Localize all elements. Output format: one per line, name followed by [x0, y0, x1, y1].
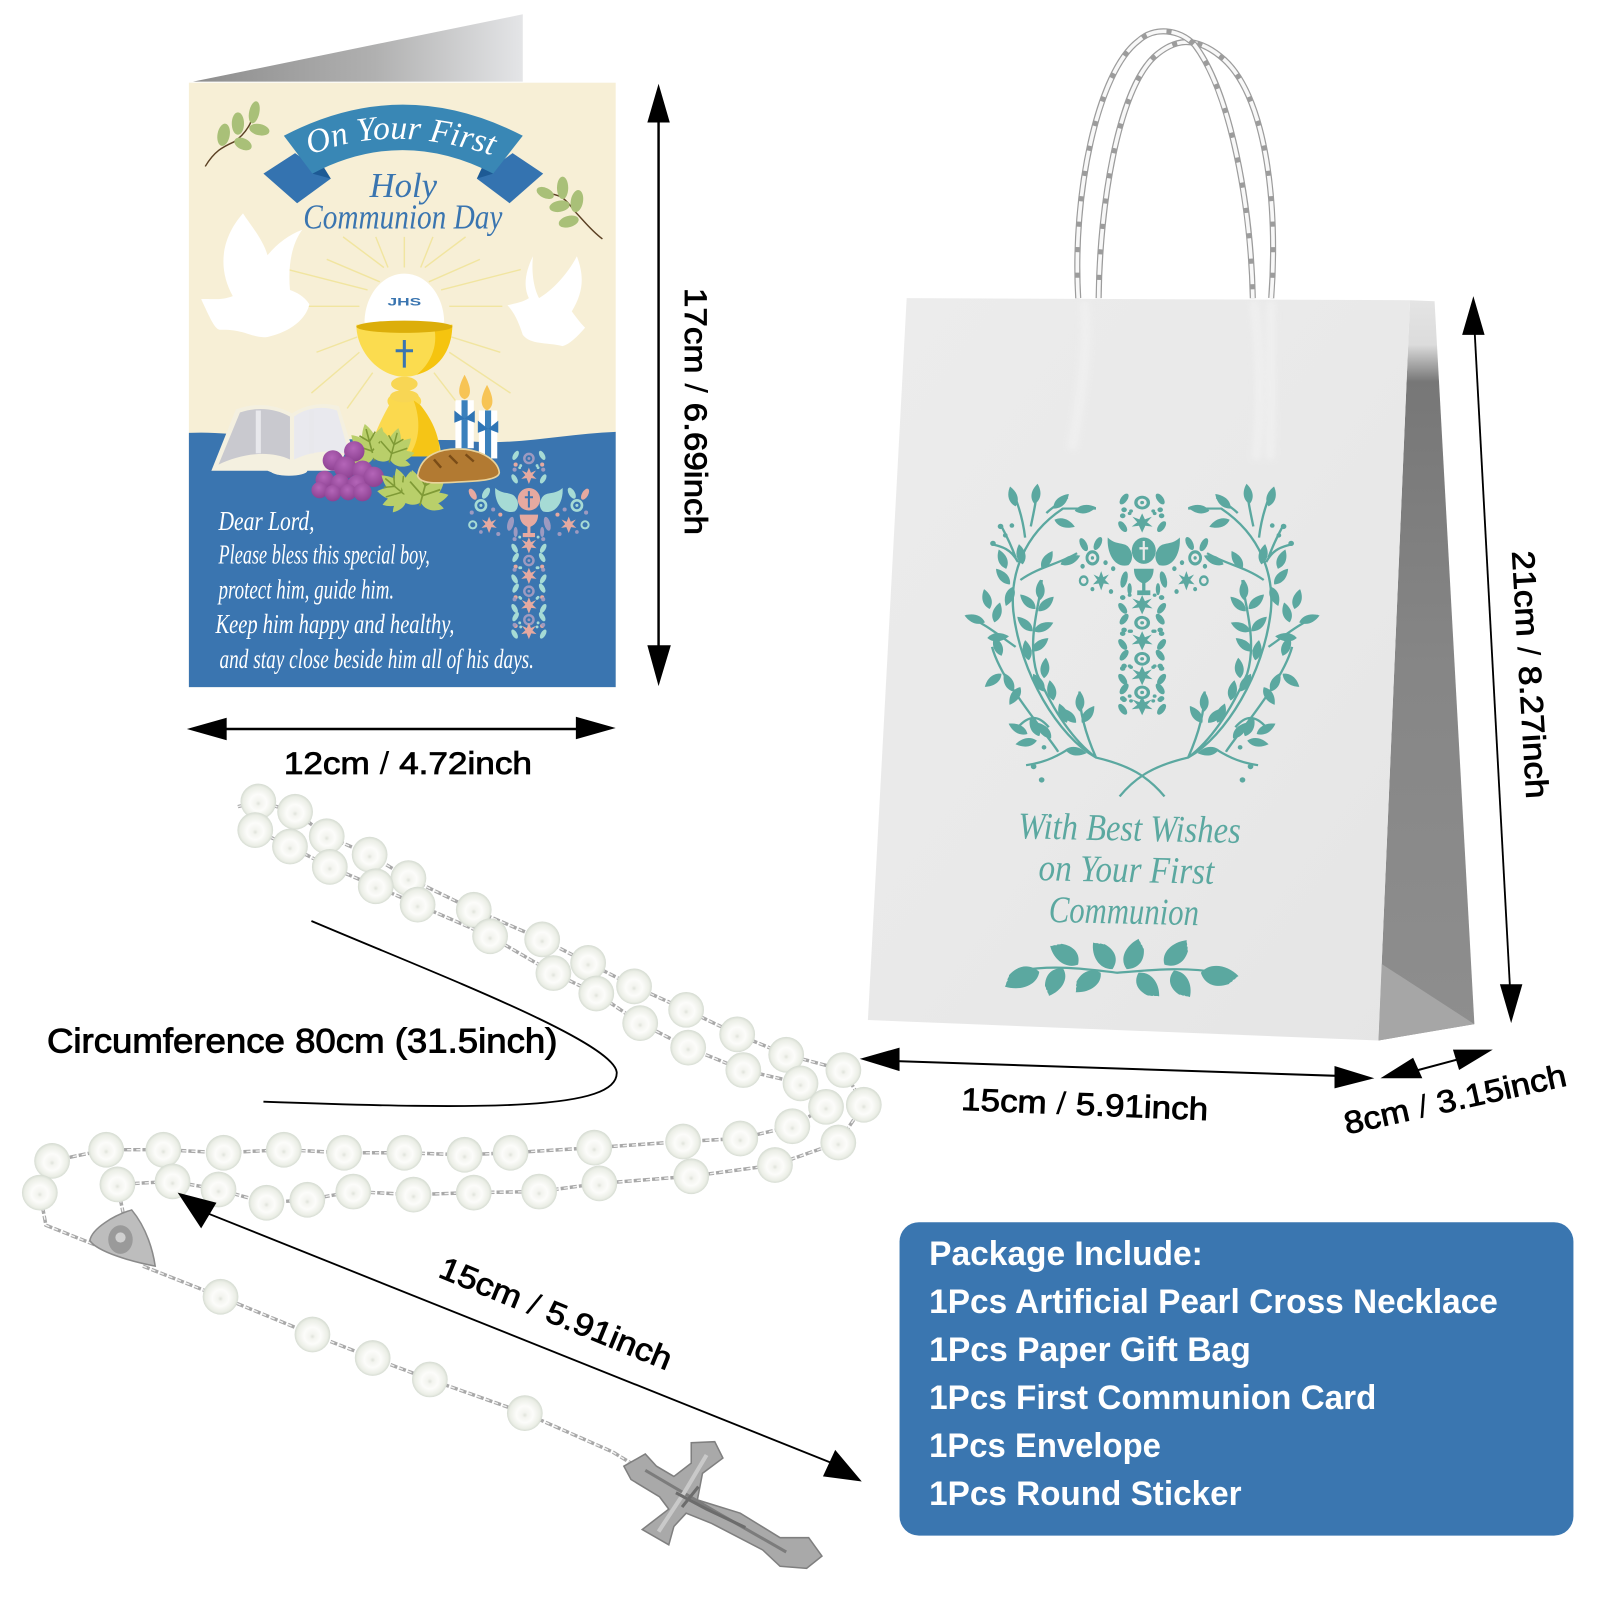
bread loaf	[418, 449, 499, 483]
wheat leaves lower	[366, 457, 457, 518]
bag wreath right	[1120, 483, 1321, 796]
floral cross on card	[467, 450, 591, 640]
card title: Communion Day	[303, 198, 503, 237]
rosary length label: 15cm / 5.91inch	[434, 1249, 678, 1377]
card width label: 12cm / 4.72inch	[284, 745, 532, 781]
card title: Holy	[369, 166, 438, 205]
prayer text: Dear Lord,	[218, 505, 314, 536]
card height arrow	[647, 84, 671, 686]
pearl beads	[22, 784, 882, 1431]
ribbon banner: On Your First	[308, 117, 498, 154]
package list: 1Pcs Paper Gift Bag	[929, 1331, 1251, 1369]
candles	[454, 375, 498, 458]
blue lower band	[189, 432, 616, 687]
bag depth arrow	[1380, 1050, 1493, 1078]
bag front	[868, 298, 1410, 1040]
bag greeting text: on Your First	[1038, 847, 1216, 893]
package list	[929, 1235, 1498, 1513]
card back flap	[193, 14, 523, 82]
bag height arrow	[1462, 296, 1522, 1023]
crucifix	[624, 1442, 822, 1568]
wheat leaves upper	[339, 417, 422, 470]
package list: Package Include:	[929, 1235, 1203, 1273]
dove right	[507, 256, 585, 346]
rays	[288, 237, 521, 408]
package list: 1Pcs First Communion Card	[929, 1379, 1376, 1417]
package list: 1Pcs Round Sticker	[929, 1475, 1242, 1513]
medal	[90, 1210, 155, 1266]
package list: 1Pcs Envelope	[929, 1427, 1161, 1465]
gift bag	[868, 31, 1474, 1040]
prayer text: Keep him happy and healthy,	[215, 608, 454, 639]
bag greeting text: With Best Wishes	[1018, 805, 1241, 852]
package include panel	[900, 1222, 1573, 1536]
prayer text: and stay close beside him all of his days.	[220, 643, 534, 674]
greeting card	[188, 14, 616, 688]
bag height label: 21cm / 8.27inch	[1505, 550, 1555, 799]
card title	[303, 166, 503, 237]
package list: 1Pcs Artificial Pearl Cross Necklace	[929, 1283, 1498, 1321]
card cream front	[189, 83, 616, 687]
bag width arrow	[860, 1048, 1374, 1088]
prayer text	[215, 505, 534, 674]
bag greeting text	[1018, 805, 1241, 934]
circumference curve	[263, 921, 617, 1106]
card height label: 17cm / 6.69inch	[678, 288, 714, 535]
bag handles	[1077, 31, 1273, 298]
bag wreath left	[963, 483, 1165, 796]
bag creases	[1072, 301, 1271, 459]
chains	[40, 802, 864, 1463]
sprig left	[205, 100, 271, 166]
rosary necklace	[22, 784, 882, 1568]
bag side gusset	[1378, 300, 1474, 1040]
host	[365, 274, 444, 323]
dove left	[201, 213, 309, 337]
open book	[211, 404, 350, 476]
bag width label: 15cm / 5.91inch	[961, 1081, 1209, 1127]
bag leaf branch	[1000, 936, 1240, 1003]
bag depth label: 8cm / 3.15inch	[1340, 1057, 1570, 1141]
prayer text: Please bless this special boy,	[218, 539, 430, 570]
bag floral cross	[1078, 492, 1210, 716]
circumference label: Circumference 80cm (31.5inch)	[47, 1023, 557, 1061]
prayer text: protect him, guide him.	[217, 573, 394, 604]
chalice	[356, 321, 452, 456]
host: JHS	[387, 296, 422, 308]
rosary length arrow	[178, 1193, 862, 1482]
sprig right	[535, 177, 602, 239]
grapes	[311, 441, 384, 501]
ribbon banner	[264, 104, 544, 204]
bag greeting text: Communion	[1048, 889, 1199, 934]
card width arrow	[187, 717, 616, 740]
